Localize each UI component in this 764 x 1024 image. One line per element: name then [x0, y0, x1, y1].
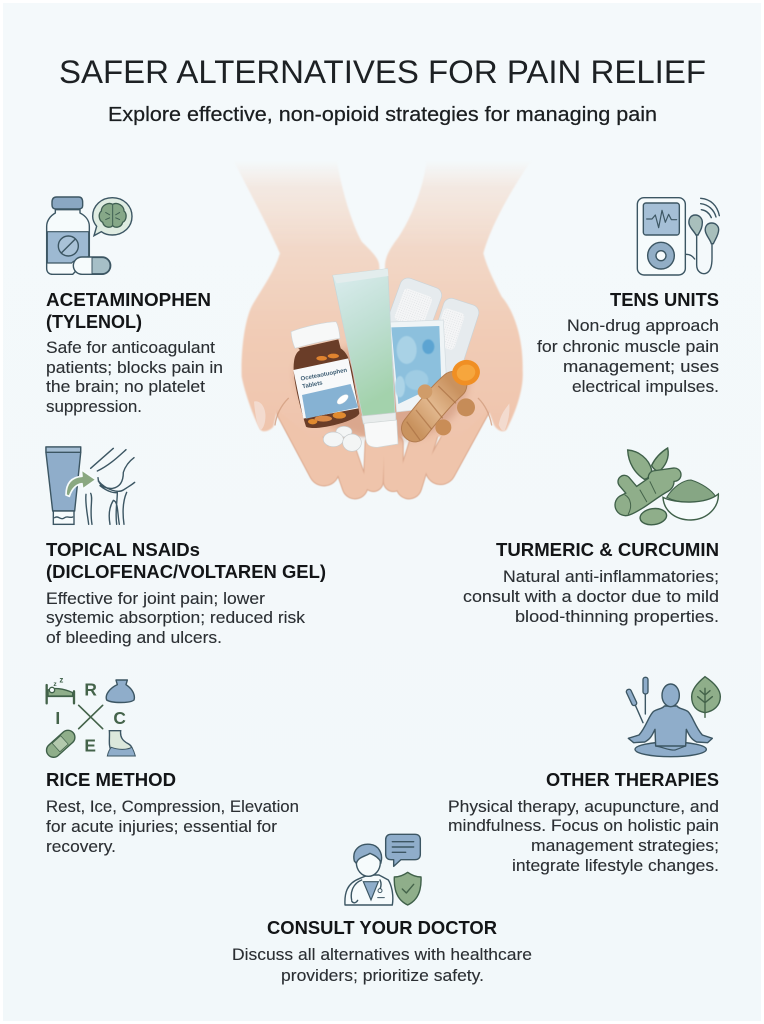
body text: management strategies;	[531, 837, 719, 855]
section: topical NSAIDs	[46, 447, 326, 647]
body text: integrate lifestyle changes.	[512, 857, 719, 875]
section: other therapies	[448, 677, 720, 875]
title: SAFER ALTERNATIVES FOR PAIN RELIEF	[59, 54, 706, 90]
icon: RICE diagram: R	[84, 680, 97, 700]
icon: RICE diagram: z	[53, 681, 57, 688]
body text: electrical impulses.	[572, 378, 719, 396]
heading: CONSULT YOUR DOCTOR	[267, 917, 497, 938]
heading	[46, 289, 211, 332]
icon: pill bottle with brain bubble	[47, 197, 132, 274]
icon: doctor with chat bubble and shield	[345, 834, 421, 905]
body text	[463, 568, 719, 626]
body text: recovery.	[46, 838, 116, 856]
icon: meditating figure with needles and leaf	[626, 677, 720, 757]
heading: (TYLENOL)	[46, 311, 142, 332]
icon: TENS device	[637, 198, 719, 275]
icon: RICE diagram	[44, 676, 135, 760]
thumb creases and nails	[254, 398, 509, 431]
body text: Non-drug approach	[567, 317, 719, 335]
illustration: cupped hands holding remedies	[233, 160, 532, 486]
body text	[46, 798, 299, 856]
heading: TENS UNITS	[610, 289, 719, 310]
section: TENS units	[537, 198, 719, 396]
body text: of bleeding and ulcers.	[46, 629, 222, 647]
subtitle: Explore effective, non-opioid strategies for managing pain	[108, 103, 657, 126]
loose tablets	[323, 426, 361, 451]
body text: Effective for joint pain; lower	[46, 590, 266, 608]
icon: RICE diagram: z	[59, 676, 63, 685]
body text	[232, 946, 532, 985]
bottle label text: Oceteaotuophen	[300, 368, 348, 383]
section: turmeric and curcumin	[463, 448, 719, 626]
body text: Physical therapy, acupuncture, and	[448, 798, 719, 816]
pill bottle	[291, 322, 359, 428]
ice pack	[390, 320, 447, 412]
body text: for acute injuries; essential for	[46, 818, 278, 836]
body text: mindfulness. Focus on holistic pain	[448, 817, 719, 835]
heading: (DICLOFENAC/VOLTAREN GEL)	[46, 561, 326, 582]
body text: Discuss all alternatives with healthcare	[232, 946, 532, 964]
heading: TOPICAL NSAIDs	[46, 539, 200, 560]
icon: RICE diagram: I	[55, 708, 60, 728]
body text: Safe for anticoagulant	[46, 339, 215, 357]
heading	[46, 539, 326, 582]
fingers	[292, 407, 475, 486]
body text: for chronic muscle pain	[537, 338, 719, 356]
shadow under remedies	[296, 337, 470, 440]
gel pack patches	[386, 276, 481, 380]
section: RICE method	[44, 676, 299, 856]
heading: TURMERIC & CURCUMIN	[496, 539, 719, 560]
body text: Natural anti-inflammatories;	[503, 568, 719, 586]
section: acetaminophen	[46, 197, 223, 416]
body text: patients; blocks pain in	[46, 359, 223, 377]
icon: turmeric root, leaves and powder bowl	[624, 448, 718, 526]
pill bottle: Tablets	[302, 380, 324, 390]
body text: systemic absorption; reduced risk	[46, 609, 306, 627]
body text	[537, 317, 719, 396]
body text: consult with a doctor due to mild	[463, 588, 719, 606]
body text: blood-thinning properties.	[515, 608, 719, 626]
icon: RICE diagram: C	[113, 708, 126, 728]
icon: RICE diagram: E	[84, 736, 96, 756]
heading: OTHER THERAPIES	[546, 769, 719, 790]
body text	[46, 590, 306, 647]
turmeric root	[407, 357, 483, 440]
heading: RICE METHOD	[46, 769, 176, 790]
body text	[46, 339, 223, 416]
hands: arms and palms	[233, 160, 532, 437]
body text: Rest, Ice, Compression, Elevation	[46, 798, 299, 816]
body text: providers; prioritize safety.	[281, 967, 484, 985]
body text: the brain; no platelet	[46, 378, 205, 396]
heading: ACETAMINOPHEN	[46, 289, 211, 310]
body text: suppression.	[46, 398, 142, 416]
icon: gel tube and knee joint	[46, 447, 135, 524]
section: consult your doctor	[232, 834, 532, 985]
cream tube	[333, 269, 398, 447]
body text	[448, 798, 719, 875]
body text: management; uses	[563, 358, 719, 376]
